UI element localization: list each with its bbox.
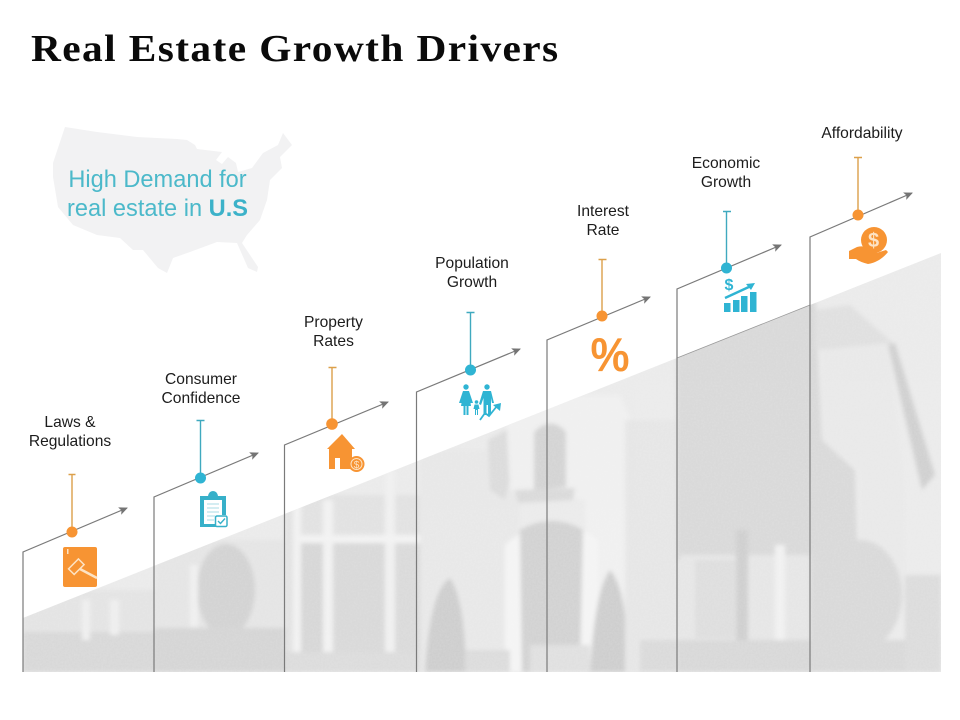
gable and brick wall [818,307,887,348]
label: Consumer [165,371,237,388]
step line and arrow [416,349,520,672]
connector stem [723,212,731,268]
step 3: Property Rates [284,314,388,672]
step line and arrow [23,508,127,672]
step line and arrow [547,297,650,672]
icon: family with rising arrow [459,384,501,420]
label: Rate [587,222,619,239]
step line and arrow [677,245,781,672]
connector stem [598,260,606,316]
step 5: Interest Rate [547,203,650,672]
icon: US map silhouette [53,127,292,273]
icon: growth bars with dollar: $ [725,277,734,294]
step 7: Affordability [810,125,912,672]
icon: law book and gavel [63,547,97,587]
marker dot [326,418,338,430]
connector stem [328,368,336,424]
step line and arrow [810,193,912,672]
label: Population [435,255,509,272]
connector stem [854,158,862,215]
label: Regulations [29,433,111,450]
marker dot [721,262,732,274]
label: Growth [701,174,751,191]
icon: hand holding dollar coin: $ [868,230,879,252]
label: Affordability [821,125,903,142]
icon: growth bars with dollar [724,277,756,312]
step 1: Laws & Regulations [23,414,127,672]
callout: high demand text: High Demand for [68,167,247,193]
icon: percent sign: % [590,328,630,381]
step 2: Consumer Confidence [154,371,258,672]
step 6: Economic Growth [677,155,781,672]
icon: house with dollar coin: $ [354,460,360,471]
marker dot [195,472,206,484]
marker dot [465,364,476,376]
title: Real Estate Growth Drivers [31,28,560,70]
US map with demand callout [53,127,292,273]
connector stem [466,312,474,370]
marker dot [596,310,608,322]
house photo background [23,250,941,673]
label: Laws & [44,414,96,431]
step line and arrow [284,402,388,672]
label: Economic [692,155,760,172]
callout: high demand text: real estate in U.S [67,196,248,222]
label: Growth [447,274,497,291]
tree mass [677,290,860,640]
marker dot [852,210,864,220]
connector stem [196,420,204,478]
step 4: Population Growth [416,255,520,672]
step line and arrow [154,453,258,672]
marker dot [66,526,78,538]
icon: clipboard checklist [200,491,227,527]
label: Rates [313,333,354,350]
label: Property [304,314,363,331]
icon: hand holding dollar coin [849,227,888,264]
label: Confidence [162,390,240,407]
icon: house with dollar coin [327,434,364,472]
label: Interest [577,203,630,220]
connector stem [68,474,76,532]
